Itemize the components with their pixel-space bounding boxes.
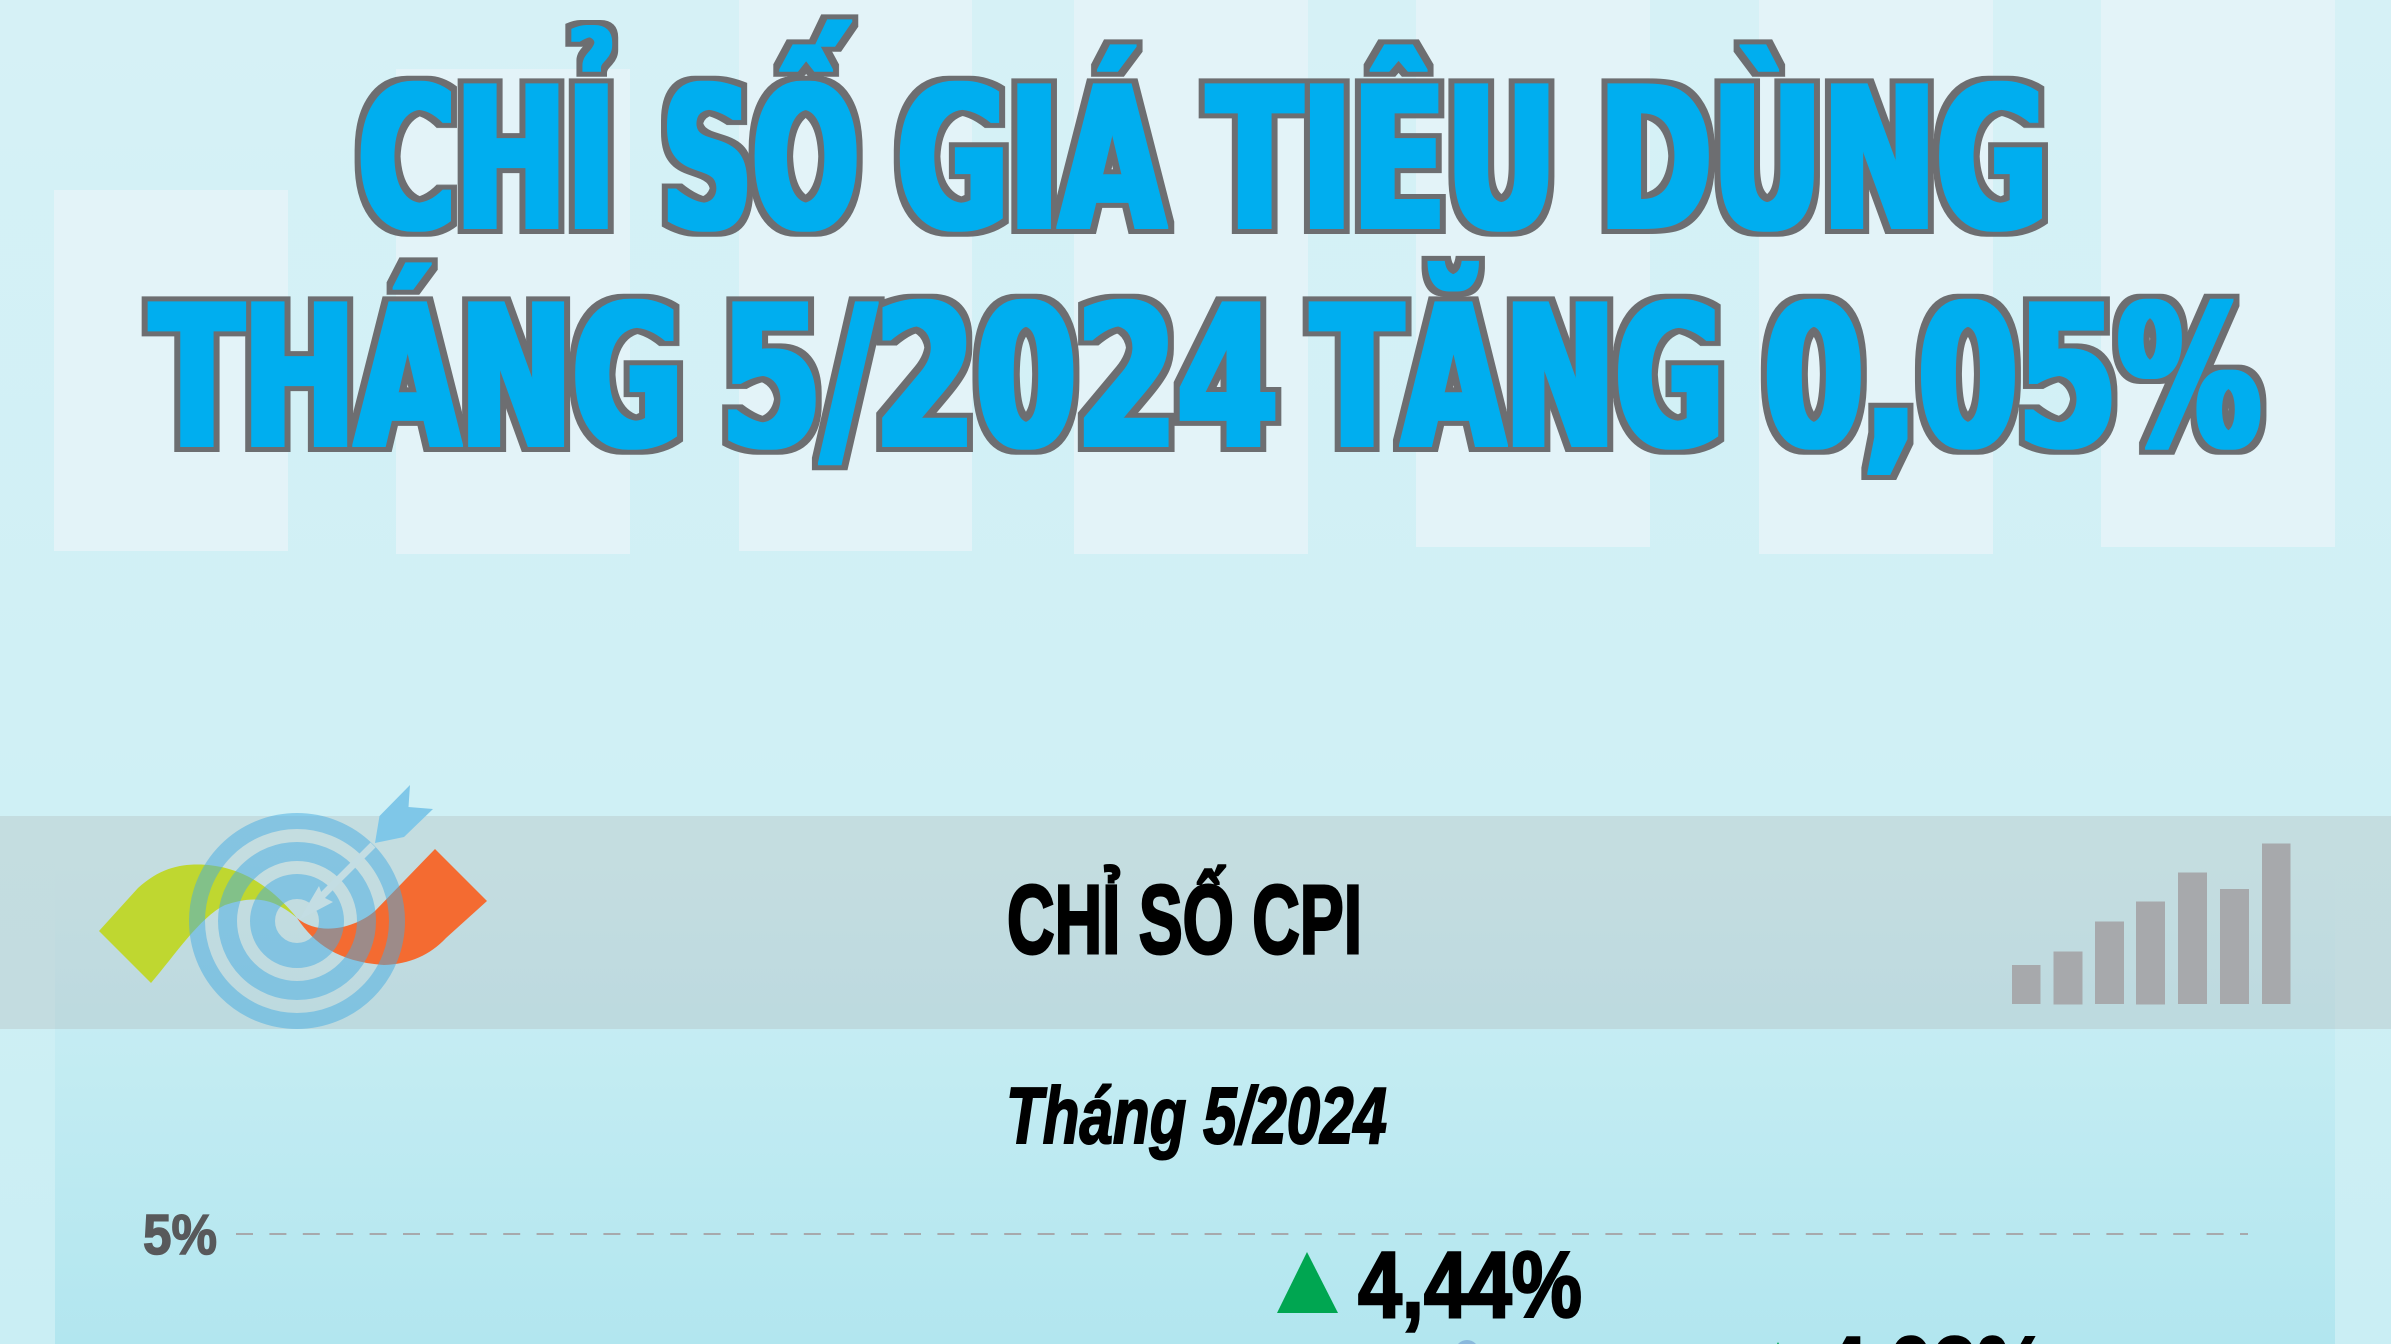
decorative background bars xyxy=(54,0,2335,554)
icon: ribbon xyxy=(99,849,487,983)
axis label 5%: 5% xyxy=(143,1203,217,1267)
title: THÁNG xyxy=(151,264,683,493)
title: SỐ xyxy=(662,21,859,275)
chart subtitle: Tháng 5/2024 xyxy=(1006,1071,1387,1160)
value 4,44%: 4,44% xyxy=(1358,1232,1582,1337)
up triangle marker xyxy=(1277,1252,1338,1313)
icon: target with arrow xyxy=(197,785,433,1021)
title: GIÁ xyxy=(897,46,1165,275)
section band xyxy=(0,816,2391,1029)
title: CHỈ xyxy=(358,27,616,275)
title: TIÊU xyxy=(1208,46,1557,275)
data point xyxy=(1455,1340,1479,1344)
up triangle marker 2 xyxy=(1747,1342,1809,1344)
title: 5/2024 xyxy=(721,264,1278,493)
title xyxy=(151,21,2261,493)
chart: axis and values xyxy=(143,1203,2248,1344)
icon: small bar chart xyxy=(2012,844,2290,1004)
section heading: CHỈ SỐ CPI xyxy=(1007,865,1362,974)
title: DÙNG xyxy=(1599,46,2048,275)
title: TĂNG xyxy=(1312,262,1724,493)
chart panel background xyxy=(55,860,2335,1344)
